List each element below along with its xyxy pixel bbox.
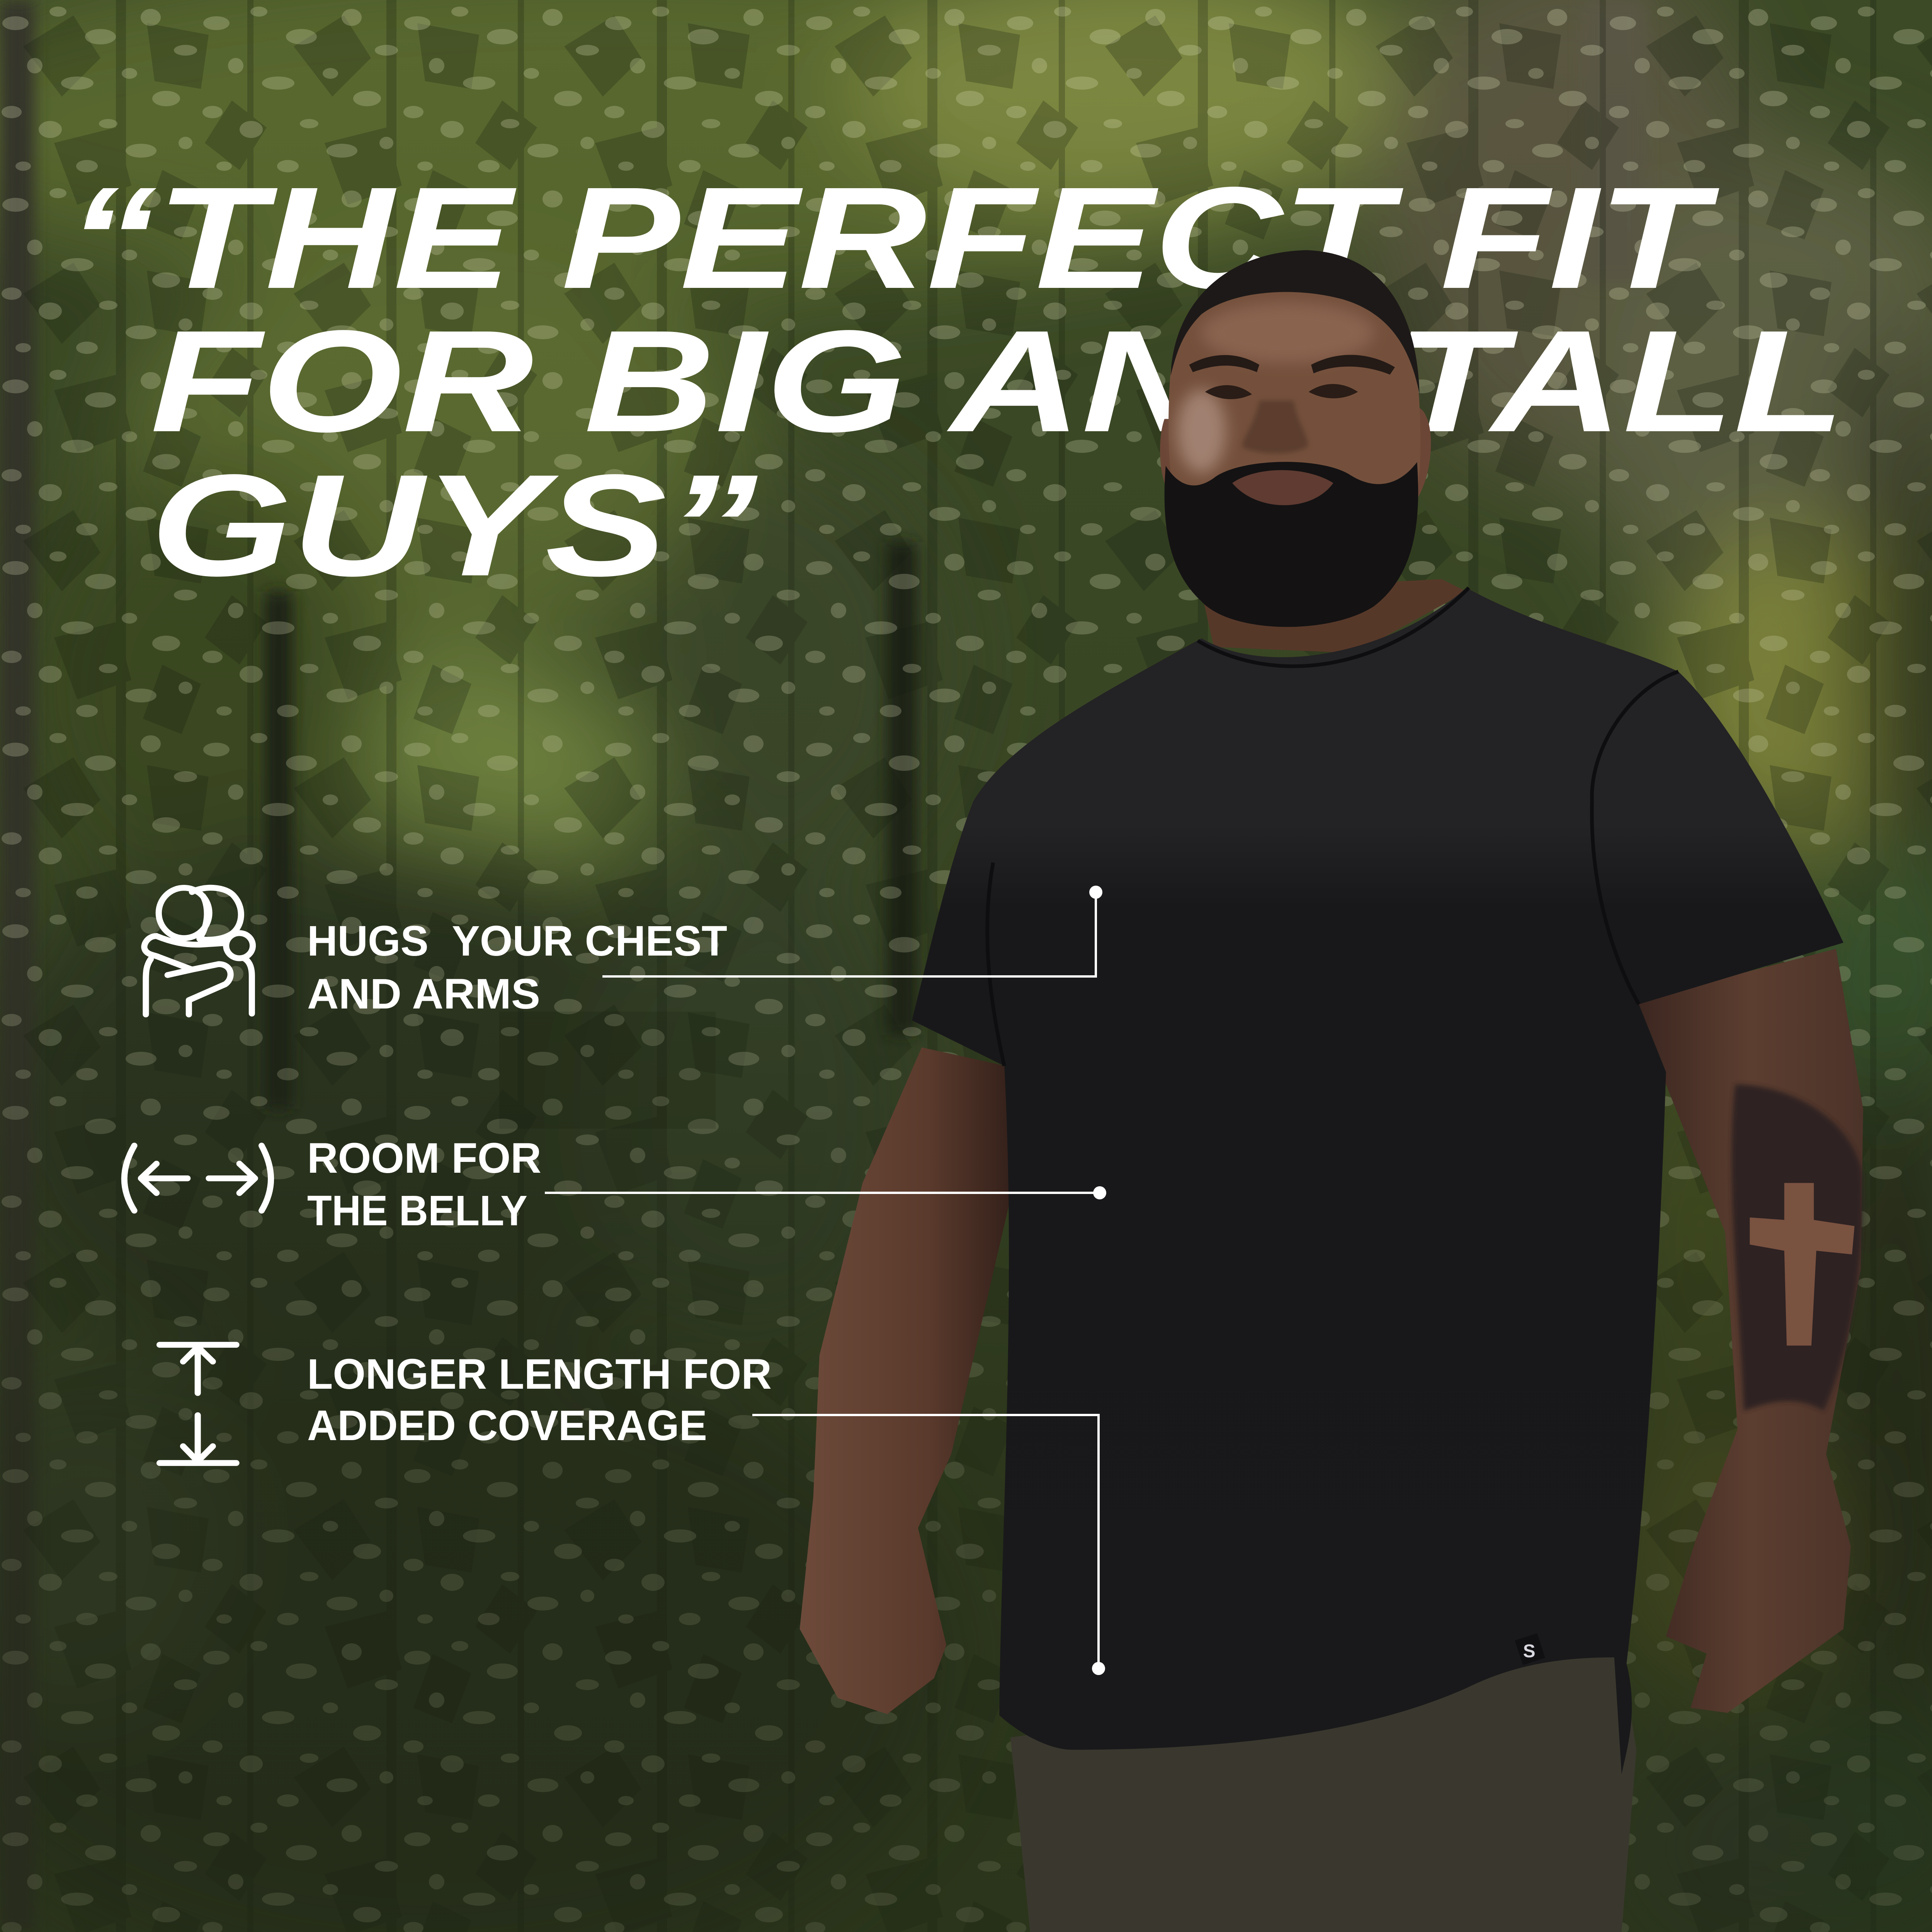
eyebrows xyxy=(1189,355,1395,374)
caption: room for the belly: ROOM FOR xyxy=(307,1134,541,1182)
neck xyxy=(1201,579,1466,653)
lips xyxy=(1232,470,1333,505)
ears xyxy=(1160,406,1431,499)
icon: length arrows xyxy=(160,1345,236,1463)
man in black t-shirt xyxy=(800,250,1863,1932)
beard xyxy=(1165,462,1418,627)
trousers xyxy=(1010,1651,1636,1932)
sleeve seams and collar xyxy=(987,588,1678,1066)
caption: hugs your chest: HUGS YOUR CHEST xyxy=(307,917,727,965)
hair xyxy=(1171,250,1420,394)
forehead highlight xyxy=(1201,303,1374,362)
caption: room for the belly: THE BELLY xyxy=(307,1187,527,1235)
icon: width arrows xyxy=(124,1146,271,1211)
title: FOR BIG AND TALL xyxy=(150,301,1845,462)
title: GUYS” xyxy=(150,445,758,606)
left arm and hand xyxy=(800,1048,1014,1714)
callout line: belly xyxy=(545,1186,1106,1199)
tattoo xyxy=(1731,1084,1862,1411)
callout line: chest xyxy=(602,886,1102,976)
title: “THE PERFECT FIT xyxy=(68,157,1720,319)
shirt size tag xyxy=(1515,1633,1545,1665)
caption: longer length: LONGER LENGTH FOR xyxy=(307,1350,772,1398)
icon: hug xyxy=(144,888,253,1014)
title xyxy=(68,157,1845,606)
face xyxy=(1168,281,1420,579)
right arm and hand xyxy=(1636,949,1863,1713)
caption: hugs your chest xyxy=(307,917,727,1018)
caption: longer length xyxy=(307,1350,772,1449)
caption: hugs your chest: AND ARMS xyxy=(307,970,540,1018)
nose xyxy=(1242,400,1309,454)
head xyxy=(1160,250,1431,627)
caption: longer length: ADDED COVERAGE xyxy=(307,1402,707,1449)
eyes xyxy=(1205,384,1358,399)
t-shirt xyxy=(912,588,1844,1774)
shirt size tag: S xyxy=(1523,1641,1536,1662)
caption: room for the belly xyxy=(307,1134,541,1235)
callout line: length xyxy=(752,1415,1105,1675)
faint dark rectangle behind captions xyxy=(499,1012,716,1129)
